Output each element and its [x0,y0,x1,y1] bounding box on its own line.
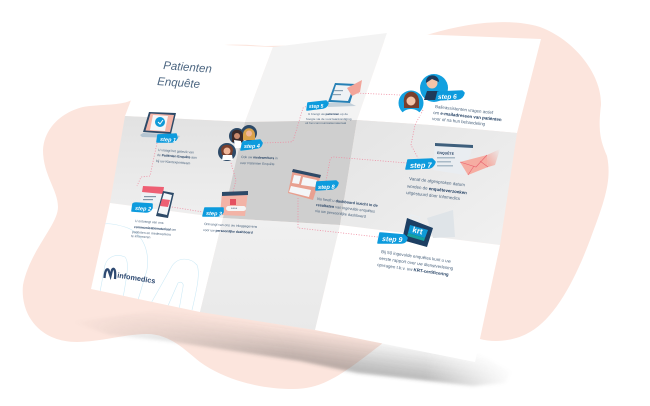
icon: laptop with envelope [327,80,362,107]
step 9 badge: step 9 [382,236,403,244]
panel: top left [125,42,273,122]
step 3 text: Ontvangt van ons uw inloggegevens [204,222,258,229]
step 7 text: Vanaf de afgesproken datum [409,176,465,187]
step 3 text: voor uw persoonlijke dashboard [203,228,253,235]
icon: dashboard [288,169,321,200]
icon: patient portraits [398,74,448,116]
step 2 badge: step 2 [135,206,151,213]
step 5 text: hoogte via de voorzaankondiging [306,117,352,121]
icon: team portraits [218,125,257,161]
title: Enquête [157,76,200,91]
step 5 badge: step 5 [309,103,324,110]
decorative arches [98,224,198,310]
step 1 [140,112,197,165]
step 1 text [156,148,197,165]
step 8 text: Nu heeft u dashboard inzicht in de [317,197,378,208]
panel: band left [110,116,245,218]
step 3 text [203,222,258,235]
step 7 [406,143,500,201]
step 1 text: U vraagt het gebruik van [158,148,194,155]
step 2 text: te informeren [131,234,151,239]
step 8 [288,169,378,219]
step 3 badge: step 3 [206,211,222,218]
sheet shadow [102,318,500,387]
panel: top middle [245,33,387,122]
step 8 badge: step 8 [318,185,336,191]
step 3 [203,191,258,235]
step 2 text: U ontvangt van ons [135,219,164,225]
icon: papers [427,210,455,238]
step 2 text: patiënten en medewerkers [132,230,171,237]
step 2 text: communicatiemateriaal om [134,225,177,232]
step 1 text: bij uw Klantexperttteam [156,159,191,165]
step 5 text: U brengt uw patiënten op de [308,112,348,116]
step 6 text [432,104,502,127]
step 8 text: resultaten van ingevulde enquêtes [316,203,375,214]
step 8 text: via uw persoonlijke dashboard [315,209,366,219]
panel: band right [340,120,517,245]
icon: phone and browser [140,186,174,218]
icon: KRT case: krt [412,225,424,236]
icon: login window: **** [231,206,238,211]
step 7 badge: step 7 [410,161,433,170]
title: Patienten [163,60,212,76]
step 6 badge: step 6 [438,94,457,101]
step 6 text: om e-mailadressen van patiënten [433,110,502,122]
step 7 text [406,176,467,201]
panel: band middle [223,120,357,225]
panel: top right [357,33,541,133]
step 4 badge: step 4 [244,144,260,150]
step 4 text: Ook uw medewerkers in [241,155,278,160]
step 6 [398,74,502,127]
icon: laptop [140,112,180,138]
panel: bottom left [91,203,223,312]
icon: survey window and envelope: ENQUÊTE [437,150,455,156]
step 1 badge: step 1 [160,137,176,144]
step 6 text: Balieassistenten vragen actief [435,104,494,115]
panel: bottom middle [200,218,340,330]
step 7 text: uitgestuurd door Infomedics [406,190,461,201]
step 8 text [315,197,378,219]
panel: bottom right [315,225,500,362]
step 2 [131,186,177,239]
step 9 text: eerste rapport over uw dienstverlening [379,256,454,271]
step 5 text [305,112,352,125]
step 4 text [240,155,278,166]
step 1 text: de Patiënten Enquête aan [157,153,197,160]
step 4 [218,125,278,166]
step 9 [377,210,455,277]
folded sheet [91,33,541,362]
title [157,60,212,91]
logo: infomedics [104,269,156,286]
logo: infomedics: infomedics [117,271,156,286]
step 4 text: over Patiënten Enquête [240,161,275,166]
step 5 [305,80,362,125]
step 5 text: uit het communicatiemateriaal [305,121,346,125]
step 9 text: Bij 50 ingevulde enquêtes kunt u uw [381,249,452,264]
step 6 text: voor of na hun behandeling [432,116,486,127]
step 9 text: opvragen t.b.v. uw KRT-certificering [377,262,449,277]
step 9 text [377,249,454,277]
step 2 text [131,219,177,239]
step 7 text: worden de enquêteverzoeken [407,184,467,195]
dotted connectors [137,93,423,237]
